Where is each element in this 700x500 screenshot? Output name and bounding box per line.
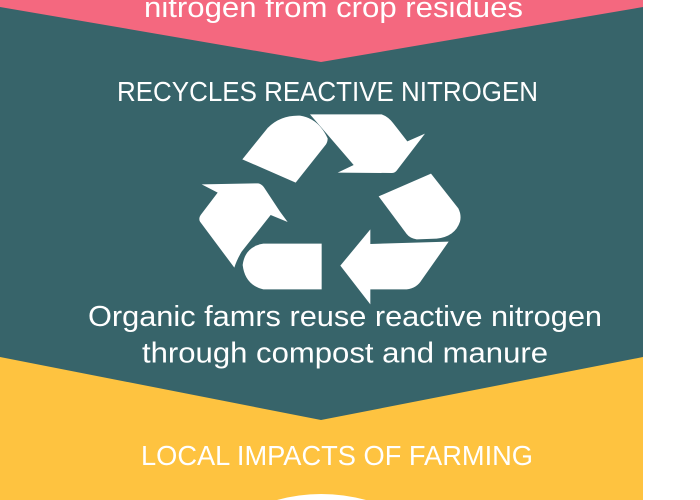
icon: white circle top <box>277 494 366 500</box>
panel: crop residues <box>0 0 643 62</box>
icon: recycling arrows <box>199 114 461 304</box>
text: organic farms description: through compost and manure <box>142 338 548 370</box>
heading: local impacts: LOCAL IMPACTS OF FARMING <box>141 440 533 471</box>
panel: local impacts of farming <box>0 340 643 500</box>
heading: recycles reactive nitrogen: RECYCLES REACTIVE NITROGEN <box>117 76 538 107</box>
text: organic farms description: Organic famrs reuse reactive nitrogen <box>88 301 602 333</box>
panel: recycles reactive nitrogen <box>0 0 643 420</box>
text: organic farms description <box>88 301 602 370</box>
